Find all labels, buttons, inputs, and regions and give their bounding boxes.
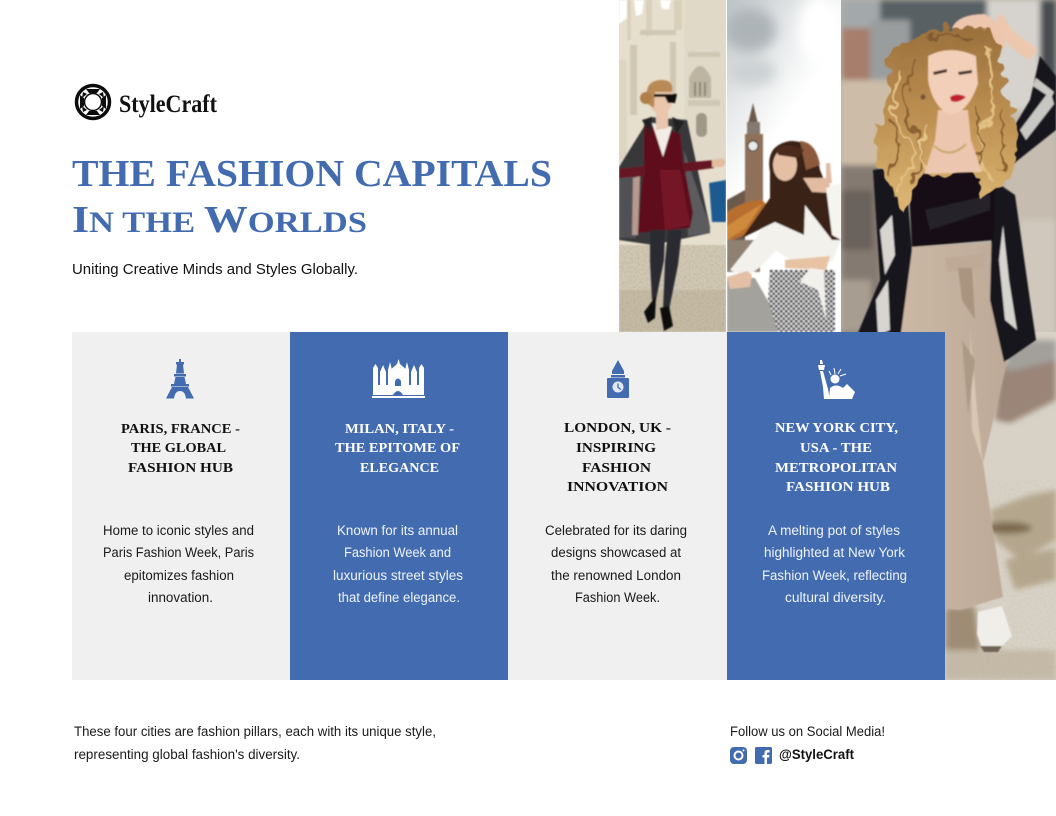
heading: MILAN, ITALY - — [345, 422, 454, 437]
logo wordmark: StyleCraft — [119, 91, 218, 118]
title: THE FASHION CAPITALS — [72, 153, 552, 195]
description: luxurious street styles — [333, 568, 463, 583]
social handle: @StyleCraft — [779, 747, 854, 762]
shoe — [977, 606, 1012, 648]
heading: THE EPITOME OF — [335, 441, 460, 456]
footer statement — [74, 724, 436, 762]
footer statement: representing global fashion's diversity. — [74, 747, 300, 762]
heading: USA - THE — [800, 441, 872, 456]
panel: New York City — [727, 332, 945, 680]
social media block: Follow us on Social Media! — [730, 724, 885, 739]
heading: THE GLOBAL — [131, 441, 226, 456]
description: A melting pot of styles — [768, 523, 900, 538]
description: designs showcased at — [551, 545, 681, 560]
heading — [775, 421, 898, 495]
social media block — [730, 724, 885, 764]
panel: London — [508, 332, 727, 680]
panel: Milan — [290, 332, 508, 680]
title — [72, 153, 552, 241]
description: Home to iconic styles and — [103, 523, 254, 538]
icon: Statue of Liberty — [818, 360, 855, 399]
panel: Paris — [72, 332, 290, 680]
icon: Eiffel Tower — [166, 359, 194, 398]
photo: Milan woman in red dress — [619, 0, 726, 332]
lower ground — [945, 332, 1056, 680]
hair — [876, 27, 1018, 208]
description: epitomizes fashion — [124, 568, 234, 583]
heading: NEW YORK CITY, — [775, 421, 898, 436]
heading: INSPIRING — [576, 441, 656, 456]
icon: Milan Cathedral — [372, 359, 425, 398]
heading: INNOVATION — [567, 480, 668, 495]
black top — [908, 170, 995, 247]
heading: FASHION HUB — [128, 461, 233, 476]
description — [103, 523, 254, 605]
heading: ELEGANCE — [360, 461, 439, 476]
subtitle: Uniting Creative Minds and Styles Globally. — [72, 261, 358, 278]
description: Fashion Week and — [344, 545, 451, 560]
jacket — [855, 165, 912, 340]
description — [333, 523, 463, 605]
description: innovation. — [148, 590, 213, 605]
photo: New York woman on rooftop — [841, 0, 1056, 680]
raised arm — [1014, 56, 1056, 164]
logo: StyleCraft — [76, 86, 218, 118]
icon: Big Ben — [607, 360, 629, 398]
description: Paris Fashion Week, Paris — [103, 545, 254, 560]
heading — [564, 421, 671, 495]
description — [762, 523, 907, 605]
photo: London woman with Big Ben — [724, 0, 842, 332]
description: Fashion Week, reflecting — [762, 568, 907, 583]
icon: gem ring — [76, 86, 110, 118]
icon: Facebook — [755, 747, 772, 764]
heading — [335, 422, 460, 476]
heading: PARIS, FRANCE - — [121, 422, 240, 437]
description: Fashion Week. — [575, 590, 660, 605]
description: the renowned London — [551, 568, 681, 583]
description: that define elegance. — [338, 590, 460, 605]
heading: LONDON, UK - — [564, 421, 671, 436]
heading: FASHION — [582, 461, 651, 476]
description: cultural diversity. — [785, 590, 886, 605]
description: Known for its annual — [337, 523, 458, 538]
heading — [121, 422, 240, 476]
description: highlighted at New York — [764, 545, 905, 560]
title: IN THE WORLDS — [72, 199, 367, 241]
description: Celebrated for its daring — [545, 523, 687, 538]
heading: METROPOLITAN — [775, 461, 897, 476]
heading: FASHION HUB — [786, 480, 890, 495]
trousers — [900, 242, 1008, 610]
description — [545, 523, 687, 605]
footer statement: These four cities are fashion pillars, each with its unique style, — [74, 724, 436, 739]
icon: Instagram — [730, 747, 747, 764]
